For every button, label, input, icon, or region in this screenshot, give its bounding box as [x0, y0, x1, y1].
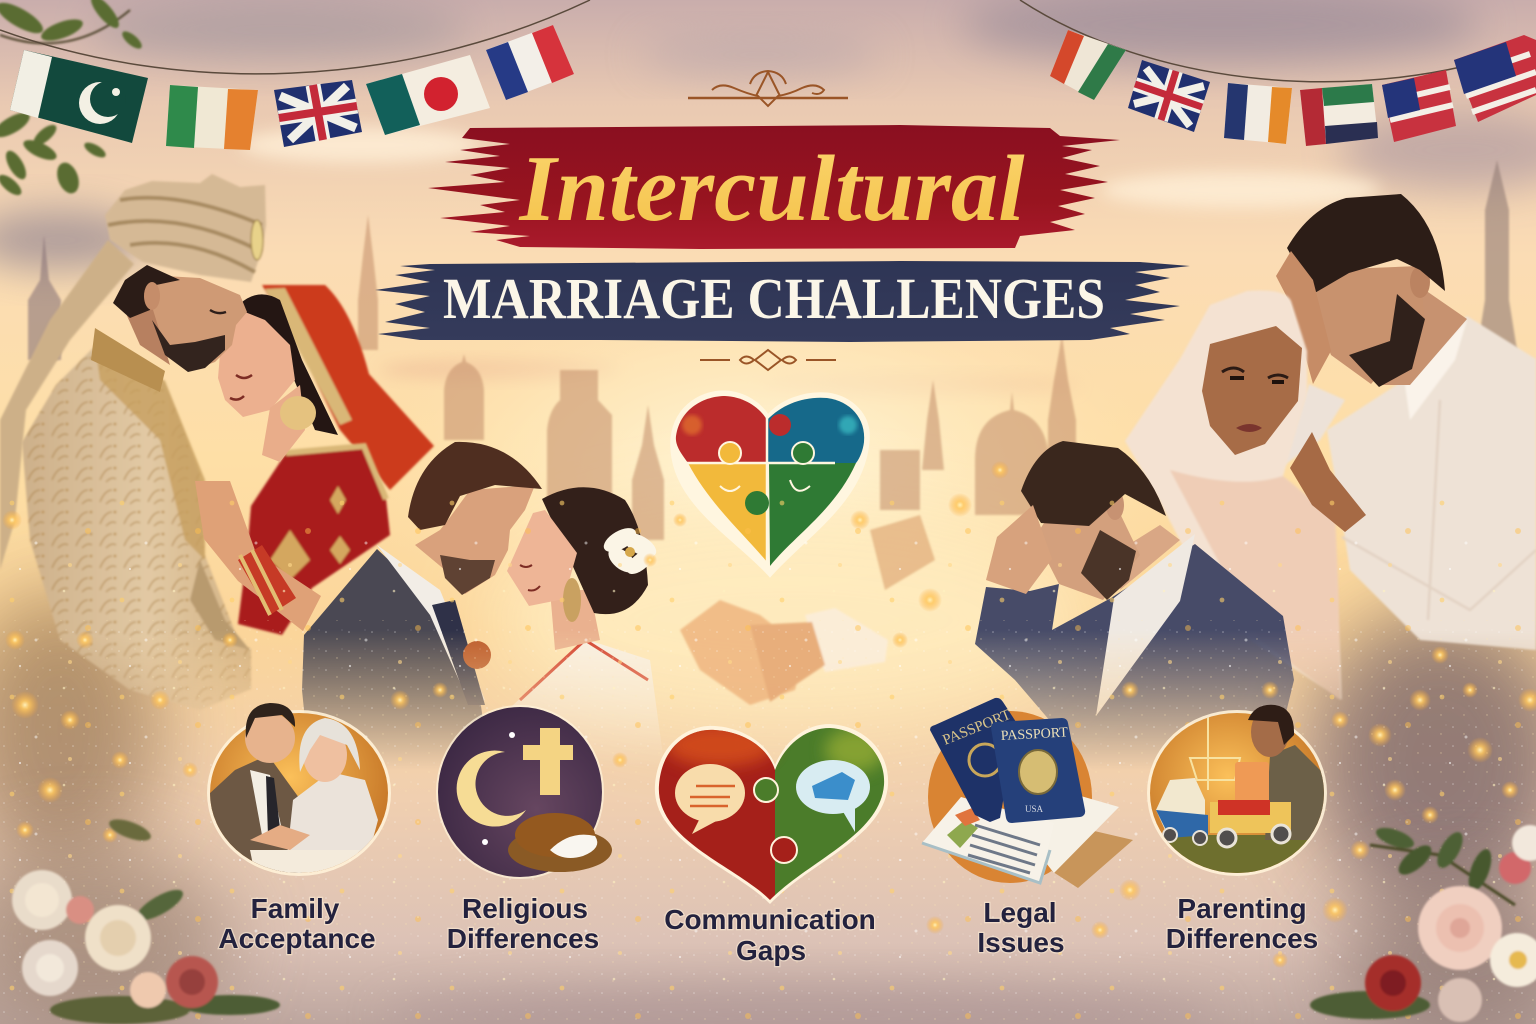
ear — [1106, 490, 1124, 520]
turban — [105, 174, 266, 282]
man head — [245, 703, 295, 763]
bride earring — [280, 396, 316, 430]
flag: Italy style — [1050, 30, 1126, 100]
label: Communication Gaps: Communication — [664, 904, 876, 935]
couple 2: suited man and bride — [302, 442, 665, 770]
passport front — [991, 718, 1085, 823]
skyline silhouette — [28, 160, 1517, 540]
woman face — [1202, 326, 1302, 455]
hijab — [1125, 290, 1342, 700]
small ornament — [700, 350, 836, 370]
man neck — [1380, 290, 1467, 385]
man ear — [1410, 266, 1430, 298]
label: Communication Gaps: Gaps — [736, 935, 806, 966]
flag: UK — [274, 80, 362, 147]
hand — [986, 505, 1052, 594]
flag: Pakistan — [10, 50, 148, 143]
shirt — [1096, 534, 1195, 716]
label: Family Acceptance: Acceptance — [218, 923, 376, 954]
flag: UK right — [1128, 60, 1210, 132]
jacket — [975, 544, 1294, 770]
face — [1035, 501, 1140, 600]
bunting left: flags — [0, 0, 590, 150]
man head — [1248, 705, 1294, 757]
label: Legal Issues: Issues — [977, 927, 1065, 958]
man beard — [1349, 294, 1425, 387]
title: Intercultural: Intercultural — [518, 137, 1024, 241]
man shirt — [377, 545, 485, 705]
icon: religious differences — [436, 705, 612, 879]
man flower — [463, 641, 491, 669]
top ornament — [688, 71, 848, 106]
flag: Japan — [366, 55, 490, 135]
woman flower — [604, 528, 656, 574]
man hair — [1287, 194, 1445, 294]
man hair — [408, 442, 542, 530]
bride hair — [234, 294, 338, 435]
bride veil — [262, 285, 434, 490]
groom beard — [152, 320, 225, 372]
neck — [1120, 525, 1180, 590]
groom collar — [91, 328, 165, 392]
icon: legal issues with passports — [922, 698, 1133, 888]
icon: family acceptance — [200, 703, 391, 880]
label: Parenting Differences: Parenting — [1177, 893, 1307, 924]
roses bottom left — [12, 815, 280, 1024]
groom ear — [144, 282, 160, 310]
foliage top left — [0, 0, 144, 199]
bride hand and bangles — [195, 481, 321, 631]
flag: Ireland — [166, 85, 258, 150]
flag: France — [486, 25, 574, 100]
woman hand on chest — [1290, 432, 1366, 532]
couple 3: hijab woman and bearded man — [1125, 194, 1536, 700]
woman neck — [550, 590, 600, 650]
beard — [1081, 530, 1136, 600]
documents — [922, 790, 1133, 888]
groom hair — [113, 265, 180, 318]
man face — [1309, 266, 1425, 384]
woman face — [507, 510, 577, 606]
subtitle: MARRIAGE CHALLENGES: MARRIAGE CHALLENGES — [443, 266, 1105, 331]
man beard — [440, 555, 495, 595]
man face — [415, 485, 535, 594]
flag: USA far right — [1454, 35, 1536, 122]
bride dress — [238, 446, 390, 635]
handshake — [680, 515, 935, 705]
man shirt — [1283, 316, 1536, 650]
passport front: USA — [1025, 804, 1044, 814]
sparkle field and bokeh — [0, 461, 1536, 1024]
label: Family Acceptance: Family — [251, 893, 340, 924]
woman dress — [512, 642, 662, 748]
passport back: PASSPORT — [941, 707, 1013, 749]
bunting right: flags — [1020, 0, 1536, 146]
hair — [1021, 441, 1166, 526]
flag: USA — [1382, 70, 1456, 142]
woman earring — [563, 578, 581, 622]
groom neck and face — [153, 276, 247, 364]
flag: France right — [1224, 83, 1292, 144]
label: Parenting Differences: Differences — [1166, 923, 1318, 954]
icon: communication gaps — [650, 720, 895, 910]
label: Religious Differences: Differences — [447, 923, 599, 954]
passport back — [930, 698, 1018, 822]
flag: UAE style — [1300, 84, 1378, 146]
passport front: PASSPORT — [1000, 725, 1069, 744]
icon: parenting differences — [1147, 705, 1327, 876]
couple 1: groom and bride — [0, 174, 434, 710]
label: Legal Issues: Legal — [983, 897, 1057, 928]
label: Religious Differences: Religious — [462, 893, 588, 924]
puzzle heart — [673, 393, 867, 574]
title brush stroke: Intercultural — [428, 125, 1120, 249]
bride face — [218, 310, 295, 417]
groom scarf — [0, 240, 134, 570]
older woman head — [299, 718, 360, 782]
stressed man in suit — [975, 441, 1294, 770]
groom sherwani — [22, 346, 251, 710]
man hand at head — [1276, 251, 1331, 384]
man suit — [302, 549, 490, 770]
subtitle brush stroke: Marriage Challenges — [375, 261, 1190, 342]
roses bottom right — [1310, 824, 1536, 1022]
woman hair — [542, 487, 648, 614]
